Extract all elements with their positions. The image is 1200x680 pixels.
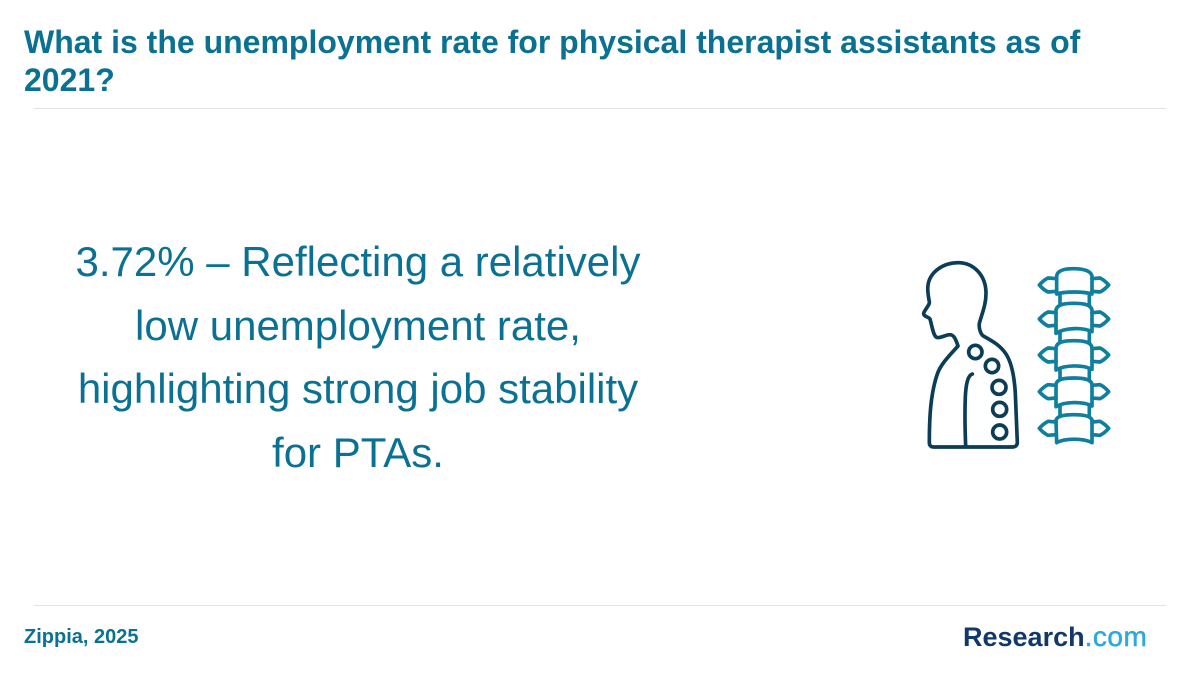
icon: spine column <box>1039 269 1109 443</box>
title: What is the unemployment rate for physical therapist assistants as of <box>24 24 1080 60</box>
main statement: for PTAs. <box>272 428 444 476</box>
source: Zippia, 2025 <box>24 626 138 648</box>
icon: person silhouette <box>924 263 1017 447</box>
main statement: highlighting strong job stability <box>78 365 638 412</box>
main statement <box>76 238 640 476</box>
main statement: low unemployment rate, <box>135 302 581 348</box>
logo: Research.com: Research.com <box>963 621 1147 652</box>
top divider <box>34 108 1166 109</box>
title <box>24 24 1080 98</box>
bottom divider <box>34 605 1166 606</box>
icon: person with spine and vertebrae <box>922 260 1111 449</box>
title: 2021? <box>24 62 115 98</box>
main statement: 3.72% – Reflecting a relatively <box>76 238 640 285</box>
